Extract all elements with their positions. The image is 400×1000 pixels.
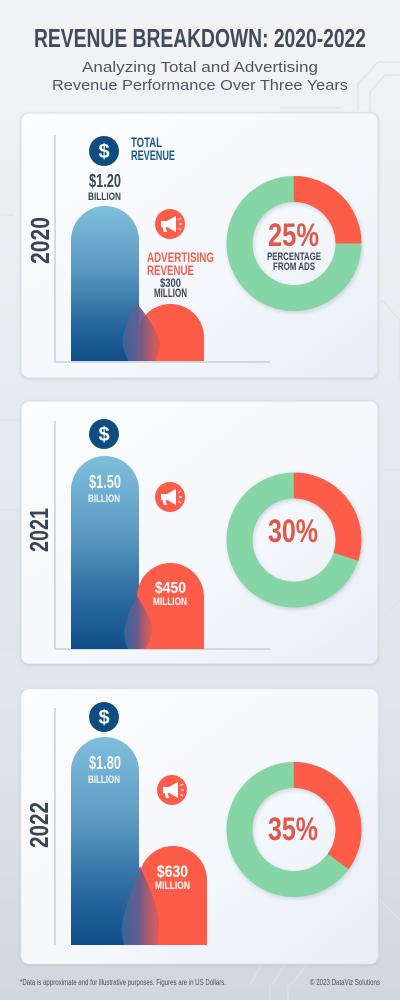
bar: total revenue 2021 — [71, 456, 139, 649]
donut label 2021: 30% — [268, 513, 318, 549]
total revenue heading — [131, 135, 175, 163]
year label 2022: 2022 — [24, 802, 54, 848]
donut label 2020 — [267, 217, 321, 273]
donut 2022 — [240, 775, 348, 884]
advertising revenue heading: REVENUE — [147, 262, 194, 278]
subtitle — [52, 60, 348, 94]
panel: 2022 — [21, 689, 378, 964]
donut label 2020: 25% — [268, 217, 319, 253]
value: total 2022 — [88, 753, 121, 786]
value: total 2020: BILLION — [88, 191, 121, 203]
year label 2021: 2021 — [24, 508, 54, 552]
icon: megaphone 2020 — [155, 209, 185, 239]
value: ads 2022: MILLION — [155, 880, 190, 892]
footnote: *Data is approximate and for illustrative purposes. Figures are in US Dollars. — [20, 977, 226, 987]
subtitle: Analyzing Total and Advertising — [82, 60, 318, 76]
icon: dollar 2020 — [89, 136, 119, 166]
donut label 2022: 35% — [268, 811, 318, 847]
icon: dollar 2021 — [89, 419, 119, 449]
chart axis 2022 — [54, 708, 56, 945]
donut 2021 — [240, 486, 348, 594]
value: ads 2021 — [153, 580, 187, 608]
icon: megaphone 2021 — [155, 482, 185, 512]
bar: advertising revenue 2020 — [137, 304, 204, 361]
value: total 2021: $1.50 — [89, 472, 121, 492]
donut label 2020: FROM ADS — [273, 261, 315, 273]
subtitle: Revenue Performance Over Three Years — [52, 78, 348, 94]
bar overlap 2022 — [122, 866, 159, 945]
donut 2020 — [240, 189, 348, 298]
value: ads 2022: $630 — [157, 862, 188, 881]
bar: total revenue 2020 — [71, 206, 139, 361]
bar: advertising revenue 2021 — [137, 563, 204, 649]
total revenue heading: TOTAL — [131, 135, 162, 150]
advertising revenue heading: ADVERTISING — [147, 249, 214, 265]
bar: total revenue 2022 — [71, 737, 139, 945]
value: total 2021 — [88, 472, 121, 505]
value: ads 2022 — [155, 862, 190, 892]
advertising revenue heading — [147, 249, 214, 278]
value: total 2020: $1.20 — [89, 171, 121, 191]
icon: megaphone 2022 — [157, 775, 187, 805]
value: ads 2020: $300 — [160, 276, 181, 290]
chart axes 2020 — [55, 135, 270, 362]
bar overlap 2021 — [124, 596, 152, 649]
value: total 2020 — [88, 171, 121, 203]
bar overlap 2020 — [122, 304, 160, 361]
panel: 2021 — [21, 401, 378, 664]
panel: 2020 — [21, 113, 378, 378]
chart axes 2021 — [55, 421, 270, 649]
value: ads 2021: MILLION — [153, 596, 187, 608]
value: ads 2020: MILLION — [154, 286, 187, 300]
value: total 2021: BILLION — [88, 493, 120, 505]
year label 2020: 2020 — [25, 217, 55, 264]
donut label 2020: PERCENTAGE — [267, 251, 321, 263]
bar: advertising revenue 2022 — [139, 846, 207, 945]
value: total 2022: $1.80 — [89, 753, 121, 773]
icon: dollar 2021: $ — [98, 424, 110, 446]
total revenue heading: REVENUE — [131, 148, 175, 163]
value: ads 2020 — [154, 276, 187, 300]
icon: dollar 2020: $ — [98, 141, 110, 163]
icon: dollar 2022: $ — [98, 707, 110, 729]
value: ads 2021: $450 — [155, 580, 186, 597]
icon: dollar 2022 — [89, 702, 119, 732]
value: total 2022: BILLION — [88, 774, 120, 786]
